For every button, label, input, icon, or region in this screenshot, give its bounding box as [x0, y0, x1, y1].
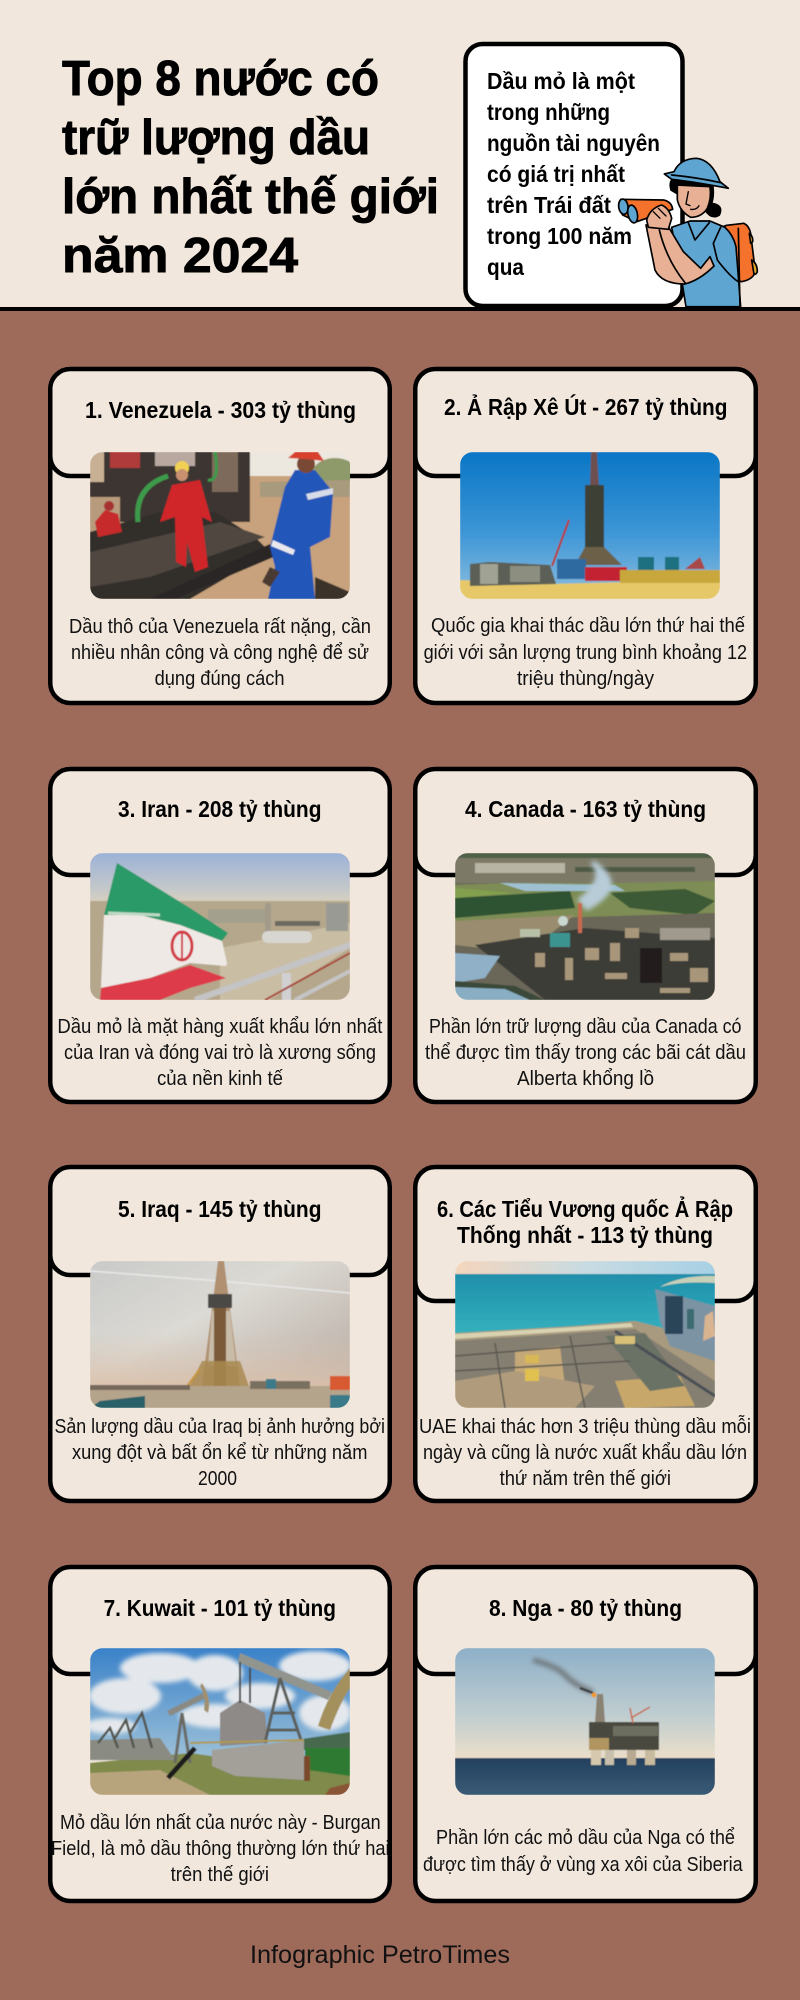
- panel: 5 Iraq: [50, 1167, 390, 1501]
- text: Kuwait: [51, 1811, 390, 1886]
- text: Iran: Dầu mỏ là mặt hàng xuất khẩu lớn nhất: [57, 1015, 383, 1038]
- text: UAE: thứ năm trên thế giới: [500, 1467, 671, 1490]
- photo: workers at oil rig: [90, 452, 357, 599]
- panel: 3 Iran: [50, 769, 390, 1102]
- photo: UAE coast: [455, 1261, 715, 1408]
- heading: Iraq: 5. Iraq - 145 tỷ thùng: [118, 1196, 322, 1222]
- panel: 7 Kuwait: [50, 1567, 390, 1901]
- heading: Saudi Arabia: 2. Ả Rập Xê Út - 267 tỷ thùng: [444, 392, 728, 420]
- text: Saudi Arabia: triệu thùng/ngày: [517, 667, 655, 690]
- text: Saudi Arabia: Quốc gia khai thác dầu lớn thứ hai thế: [431, 614, 746, 637]
- heading: UAE: Thống nhất - 113 tỷ thùng: [457, 1222, 713, 1248]
- text: Russia: [423, 1826, 743, 1876]
- title: [62, 52, 439, 283]
- title: trữ lượng dầu: [62, 111, 370, 165]
- callout: intro: trong 100 năm: [487, 223, 632, 249]
- photo: drilling derrick: [90, 1261, 350, 1408]
- icon: explorer with binoculars: [618, 158, 757, 307]
- text: Iraq: 2000: [198, 1467, 237, 1490]
- panel: 4 Canada: [415, 769, 756, 1102]
- text: Saudi Arabia: giới với sản lượng trung bình khoảng 12: [424, 641, 747, 664]
- text: Saudi Arabia: [424, 614, 747, 690]
- header band: [0, 0, 800, 311]
- callout: intro: qua: [487, 254, 524, 280]
- photo: offshore platform: [455, 1648, 715, 1795]
- title: năm 2024: [62, 229, 298, 283]
- heading: Canada: 4. Canada - 163 tỷ thùng: [465, 796, 706, 822]
- text: Iran: [57, 1015, 383, 1090]
- text: Canada: Alberta khổng lồ: [517, 1067, 654, 1090]
- text: Russia: được tìm thấy ở vùng xa xôi của Siberia: [423, 1853, 743, 1876]
- text: Russia: Phần lớn các mỏ dầu của Nga có thể: [436, 1826, 735, 1849]
- text: Venezuela: [69, 615, 371, 690]
- text: UAE: ngày và cũng là nước xuất khẩu dầu lớn: [423, 1441, 747, 1464]
- heading: Russia: 8. Nga - 80 tỷ thùng: [489, 1595, 682, 1621]
- callout: intro: Dầu mỏ là một: [487, 68, 635, 94]
- photo: oil sands refinery: [455, 853, 715, 1000]
- text: UAE: UAE khai thác hơn 3 triệu thùng dầu mỗi: [419, 1415, 751, 1438]
- text: UAE: [419, 1415, 751, 1490]
- heading: Iran: 3. Iran - 208 tỷ thùng: [118, 796, 322, 822]
- heading: UAE: [437, 1194, 733, 1248]
- text: Canada: thể được tìm thấy trong các bãi cát dầu: [425, 1041, 746, 1064]
- text: Iraq: [54, 1415, 385, 1490]
- callout: intro: có giá trị nhất: [487, 161, 625, 187]
- text: Venezuela: nhiều nhân công và công nghệ để sử: [71, 641, 369, 664]
- title: Top 8 nước có: [62, 52, 379, 106]
- text: Iran: của nền kinh tế: [157, 1067, 284, 1090]
- text: Iran: của Iran và đóng vai trò là xương sống: [64, 1041, 376, 1064]
- panel: 2 Saudi Arabia: [415, 369, 756, 703]
- text: Kuwait: Mỏ dầu lớn nhất của nước này - Burgan: [60, 1811, 381, 1834]
- callout: intro: [466, 44, 682, 306]
- text: Kuwait: trên thế giới: [171, 1863, 269, 1886]
- text: Iraq: Sản lượng dầu của Iraq bị ảnh hưởng bởi: [54, 1415, 385, 1438]
- heading: Kuwait: 7. Kuwait - 101 tỷ thùng: [104, 1595, 336, 1621]
- panel: 1 Venezuela: [50, 369, 390, 703]
- panel: 8 Russia: [415, 1567, 756, 1901]
- photo: pumpjacks: [84, 1648, 351, 1795]
- photo: Iranian flag over refinery: [90, 853, 350, 1000]
- callout: intro: trong những: [487, 99, 610, 125]
- heading: UAE: 6. Các Tiểu Vương quốc Ả Rập: [437, 1194, 733, 1222]
- callout: intro: trên Trái đất: [487, 192, 611, 218]
- text: Kuwait: Field, là mỏ dầu thông thường lớn thứ hai: [51, 1837, 390, 1860]
- text: Venezuela: dụng đúng cách: [155, 667, 285, 690]
- callout: intro: nguồn tài nguyên: [487, 130, 660, 156]
- panel: 6 UAE: [415, 1167, 756, 1501]
- heading: Venezuela: 1. Venezuela - 303 tỷ thùng: [85, 397, 356, 423]
- text: Canada: Phần lớn trữ lượng dầu của Canada có: [429, 1015, 742, 1038]
- footer credit: Infographic PetroTimes: [250, 1941, 510, 1969]
- text: Canada: [425, 1015, 746, 1090]
- text: Iraq: xung đột và bất ổn kể từ những năm: [72, 1441, 367, 1464]
- photo: desert drilling rig: [460, 452, 720, 599]
- text: Venezuela: Dầu thô của Venezuela rất nặng, cần: [69, 615, 371, 638]
- title: lớn nhất thế giới: [62, 170, 439, 224]
